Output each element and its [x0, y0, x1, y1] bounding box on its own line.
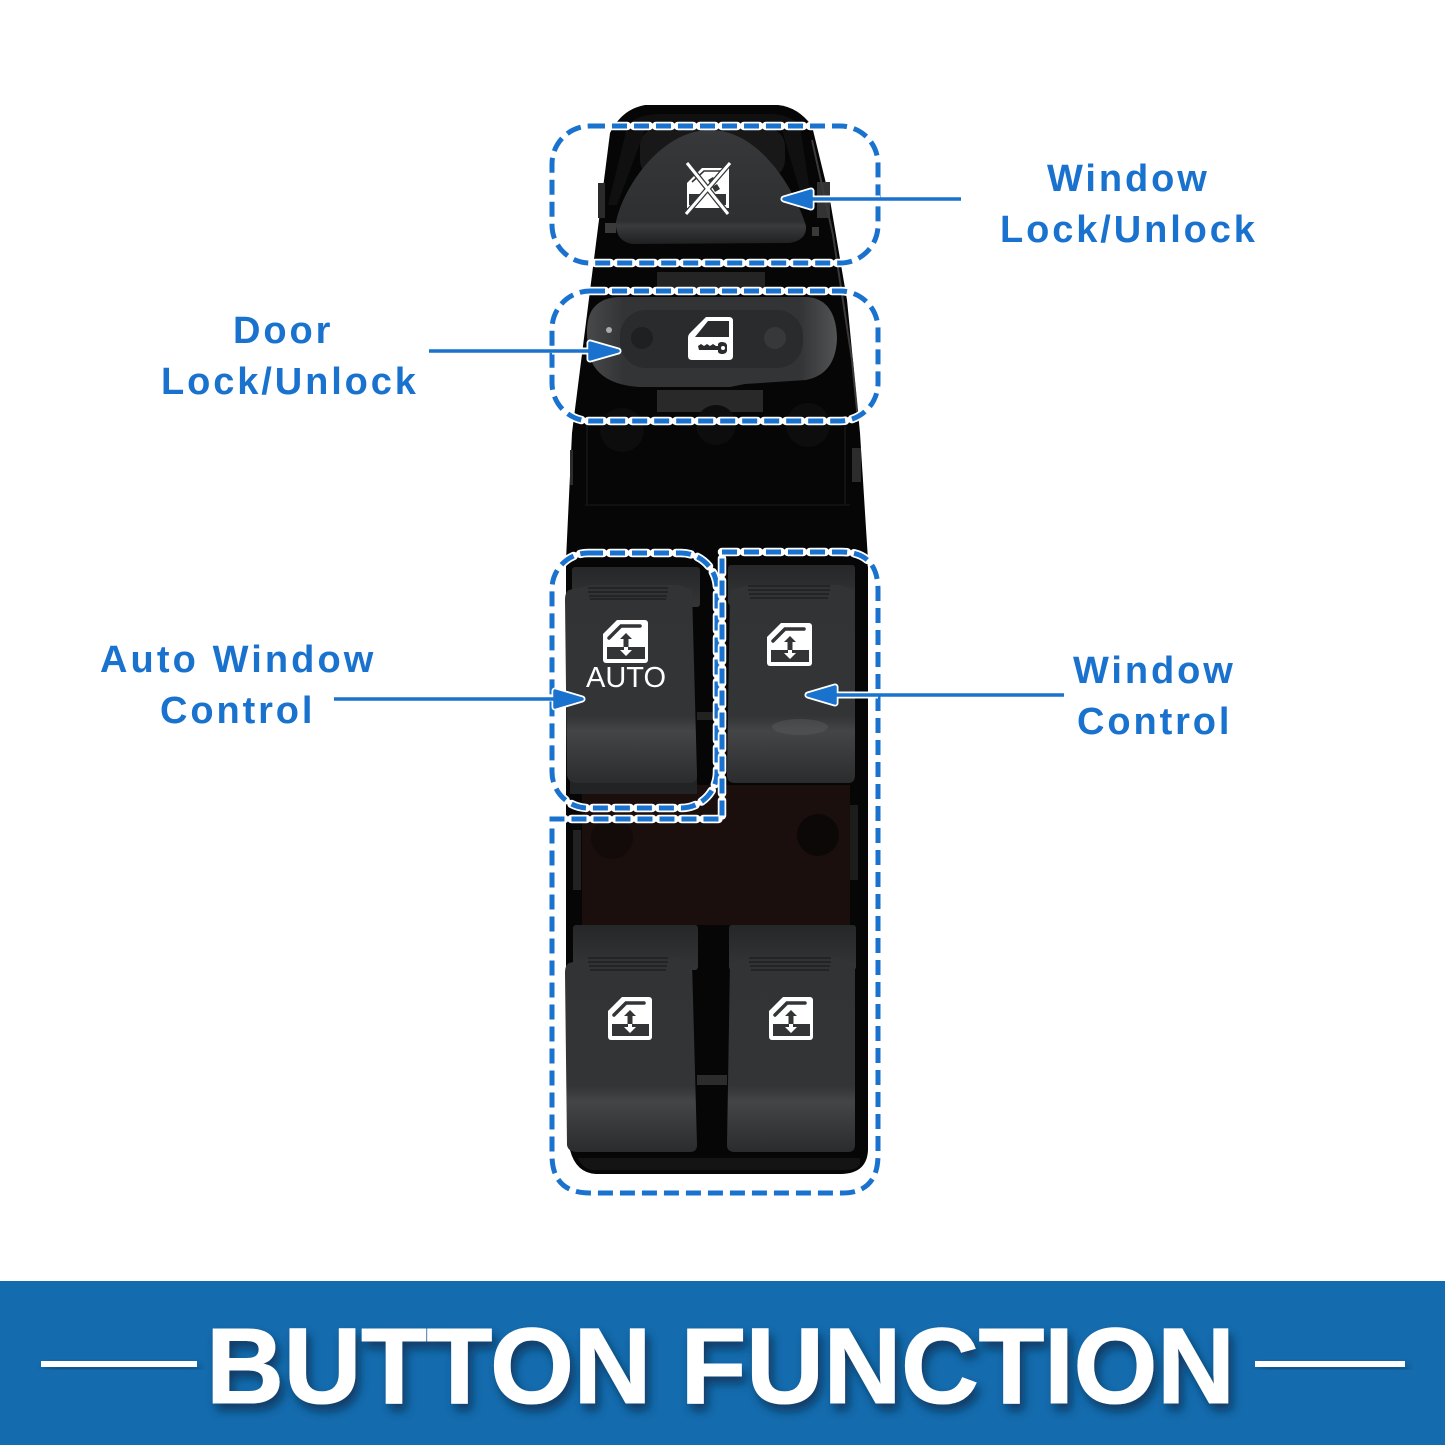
housing inner detail: [570, 114, 861, 1170]
button: window lock: [616, 130, 806, 244]
button: rear right window: [727, 925, 856, 1152]
icon: window up down: [769, 997, 813, 1040]
highlight: window lock zone: [552, 126, 878, 263]
label: door lock/unlock: Door: [233, 310, 333, 352]
arrow: window lock: [784, 191, 961, 207]
product: window switch panel: [565, 105, 868, 1174]
highlight: auto window zone: [552, 553, 717, 808]
button: auto window: [565, 567, 700, 794]
button: front window: [727, 565, 855, 783]
label: auto window control: [100, 639, 376, 732]
icon: window up down: [608, 997, 652, 1040]
icon: window lock crossed: [686, 163, 730, 214]
AUTO label: AUTO: [586, 662, 666, 694]
label: window control: [1073, 650, 1236, 743]
icon: door with key: [688, 317, 733, 360]
arrow: door lock: [429, 343, 618, 359]
label: door lock/unlock: [161, 310, 419, 403]
icon: window up down: [767, 623, 812, 666]
arrow: window control: [808, 687, 1064, 703]
arrow: auto window: [334, 691, 582, 707]
label: auto window control: Auto Window: [100, 639, 376, 681]
highlight: door lock zone: [552, 291, 878, 421]
icon: window up down: [603, 620, 648, 663]
highlight: window control zone: [552, 552, 878, 1193]
label: window lock/unlock: [1000, 158, 1258, 251]
label: window lock/unlock: Lock/Unlock: [1000, 209, 1258, 251]
label: door lock/unlock: Lock/Unlock: [161, 361, 419, 403]
banner rule left: [41, 1361, 197, 1367]
switch housing: [566, 105, 868, 1174]
banner rule right: [1255, 1361, 1405, 1367]
button: rear left window: [565, 925, 698, 1152]
banner: [0, 1281, 1445, 1445]
button: door lock: [587, 297, 837, 387]
label: window control: Window: [1073, 650, 1236, 692]
label: window lock/unlock: Window: [1047, 158, 1210, 200]
label: auto window control: Control: [160, 690, 315, 732]
banner title: BUTTON FUNCTION: [206, 1305, 1235, 1426]
label: window control: Control: [1077, 701, 1232, 743]
